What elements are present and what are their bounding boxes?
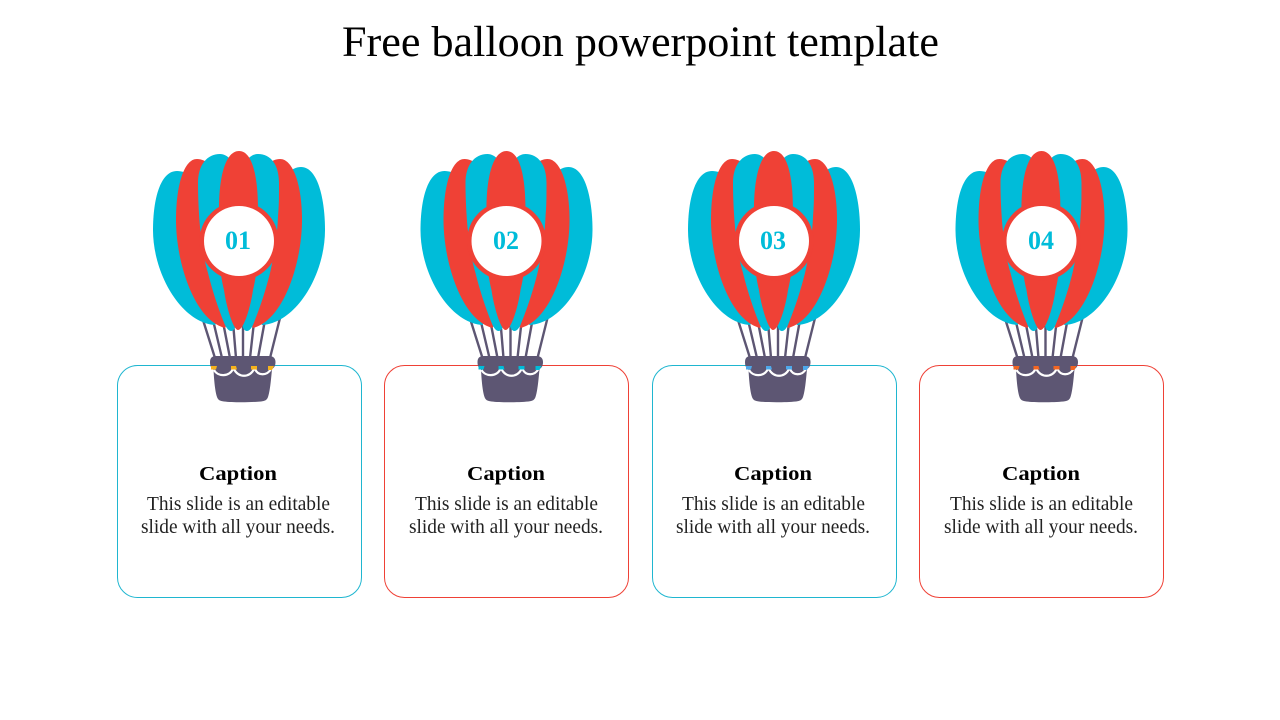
icon: hot air balloon 02 — [420, 151, 592, 402]
title: Free balloon powerpoint template — [342, 19, 939, 66]
body text 04: slide with all your needs. — [944, 517, 1138, 538]
caption heading 03: Caption — [734, 463, 812, 485]
caption heading 01: Caption — [199, 463, 277, 485]
icon: hot air balloon 01 — [153, 151, 325, 402]
card outline 02 — [384, 366, 628, 598]
panel: balloon card 03 — [652, 151, 896, 598]
number 03: 03 — [760, 226, 786, 255]
body text 02 — [409, 494, 603, 538]
caption heading 04: Caption — [1002, 463, 1080, 485]
panel: balloon card 02 — [384, 151, 628, 598]
body text 03: This slide is an editable — [682, 494, 865, 515]
body text 04: This slide is an editable — [950, 494, 1133, 515]
caption heading 02: Caption — [467, 463, 545, 485]
body text 01: This slide is an editable — [147, 494, 330, 515]
body text 02: slide with all your needs. — [409, 517, 603, 538]
card outline 04 — [920, 366, 1164, 598]
card outline 03 — [652, 366, 896, 598]
panel: balloon card 04 — [920, 151, 1164, 598]
icon: hot air balloon 04 — [956, 151, 1128, 402]
body text 01 — [141, 494, 335, 538]
body text 03 — [676, 494, 870, 538]
body text 04 — [944, 494, 1138, 538]
number 02: 02 — [493, 226, 519, 255]
icon: hot air balloon 03 — [688, 151, 860, 402]
body text 02: This slide is an editable — [415, 494, 598, 515]
number 01: 01 — [225, 226, 251, 255]
panel: balloon card 01 — [118, 151, 362, 598]
number 04: 04 — [1028, 226, 1054, 255]
card outline 01 — [118, 366, 362, 598]
body text 03: slide with all your needs. — [676, 517, 870, 538]
body text 01: slide with all your needs. — [141, 517, 335, 538]
